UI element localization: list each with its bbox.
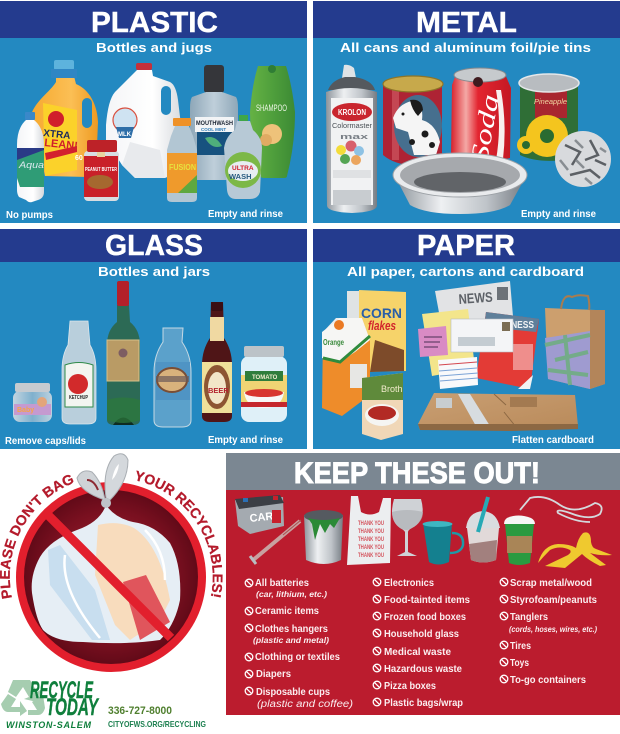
icon: plastic bag bbox=[347, 496, 391, 565]
item: clothes hangers: Clothes hangers bbox=[255, 624, 328, 635]
icon: aluminum foil ball bbox=[555, 131, 611, 187]
icon: white milk jug bbox=[106, 63, 184, 178]
note: remove caps: Remove caps/lids bbox=[5, 436, 86, 447]
item: household glass: Household glass bbox=[384, 629, 459, 640]
icon: magazine: BUSINESS bbox=[491, 320, 534, 331]
item: medical waste: Medical waste bbox=[384, 647, 451, 658]
logo text: today: TODAY bbox=[46, 694, 99, 721]
icon: orange detergent jug: LEAN! bbox=[44, 137, 78, 152]
icon: banana peel bbox=[538, 532, 612, 568]
heading: glass: GLASS bbox=[105, 230, 203, 262]
item: frozen food boxes: Frozen food boxes bbox=[384, 612, 466, 623]
panel: plastic bbox=[0, 1, 307, 223]
icon: dish soap bottle bbox=[224, 115, 262, 199]
item: pizza boxes: Pizza boxes bbox=[384, 681, 436, 692]
list column 2 bbox=[373, 578, 470, 709]
icon: baby food jar bbox=[13, 383, 52, 422]
icon: prohibition slash bbox=[47, 514, 171, 638]
icon: spray paint can: max bbox=[340, 134, 368, 141]
icon: white milk jug: MLK bbox=[118, 132, 132, 138]
icon: pineapple can bbox=[517, 74, 579, 161]
icon: beer bottle: BEER bbox=[208, 386, 229, 395]
icon: baby food jar: Baby bbox=[17, 407, 34, 414]
icon: newspaper: NEWS bbox=[458, 289, 493, 307]
icon: syringe bbox=[250, 520, 301, 564]
subheading: bottles and jugs: Bottles and jugs bbox=[96, 40, 212, 55]
panel: glass bbox=[0, 229, 307, 449]
icon: water bottle bbox=[17, 112, 44, 202]
icon: broth carton: Broth bbox=[381, 384, 403, 394]
item: styrofoam: Styrofoam/peanuts bbox=[510, 595, 597, 606]
item note: cups: (plastic and coffee) bbox=[257, 699, 353, 710]
icon: car battery bbox=[235, 495, 284, 534]
icon: wine bottle bbox=[107, 281, 140, 425]
icon: dish soap bottle: ULTRA bbox=[232, 165, 254, 172]
panel: metal bbox=[313, 1, 620, 223]
icon: orange juice carton bbox=[322, 318, 370, 416]
icon: mouthwash bottle: MOUTHWASH bbox=[196, 120, 233, 127]
heading: keep these out: KEEP THESE OUT! bbox=[294, 457, 540, 490]
icon: cereal box bbox=[347, 290, 406, 372]
icon: index card bbox=[438, 357, 478, 389]
icon: cereal box: CORN bbox=[361, 305, 402, 321]
item: tires: Tires bbox=[510, 641, 531, 652]
icon: pineapple can: Pineapple bbox=[534, 97, 567, 106]
item: all batteries: All batteries bbox=[255, 578, 309, 589]
subheading: all paper: All paper, cartons and cardboard bbox=[347, 264, 584, 279]
logo text: recycle: RECYCLE bbox=[30, 677, 94, 704]
item: scrap metal: Scrap metal/wood bbox=[510, 578, 592, 589]
item: toys: Toys bbox=[510, 658, 529, 669]
subheading: all cans and foil: All cans and aluminum foil/pie tins bbox=[340, 40, 591, 55]
icon: mouthwash bottle bbox=[190, 65, 238, 180]
list column 1 bbox=[245, 578, 353, 710]
icon: plastic cup with straw bbox=[466, 497, 500, 562]
item: plastic bags: Plastic bags/wrap bbox=[384, 698, 463, 709]
icon: coffee cup bbox=[504, 516, 535, 565]
icon: pie tin bbox=[393, 153, 527, 214]
icon: green shampoo bottle bbox=[250, 65, 295, 178]
icon: plastic bag: THANK YOU bbox=[358, 528, 384, 535]
icon: paint bucket bbox=[304, 510, 343, 564]
heading: metal: METAL bbox=[416, 7, 517, 39]
item: hazardous waste: Hazardous waste bbox=[384, 664, 462, 675]
heading: plastic: PLASTIC bbox=[91, 7, 218, 39]
icon: dog food can bbox=[383, 76, 443, 165]
icon: juice bottle: FUSION bbox=[169, 163, 196, 172]
icon: prohibition circle bbox=[16, 482, 206, 672]
website: CITYOFWS.ORG/RECYCLING bbox=[108, 719, 206, 729]
icon: yellow notepad bbox=[422, 309, 475, 376]
note: empty and rinse: Empty and rinse bbox=[208, 209, 283, 220]
panel: paper bbox=[313, 229, 620, 449]
icon: clear milk bottle bbox=[154, 328, 191, 427]
icon: spray paint can: Colormaster bbox=[332, 123, 373, 130]
item note: batteries: (car, lithium, etc.) bbox=[256, 589, 327, 599]
icon: soda can bbox=[451, 68, 511, 164]
icon: plastic bag: THANK YOU bbox=[358, 544, 384, 551]
item: tanglers: Tanglers bbox=[510, 612, 548, 623]
icon: orange detergent jug: 60 bbox=[75, 155, 83, 162]
icon: dish soap bottle: WASH bbox=[229, 172, 252, 181]
icon: tomato sauce jar bbox=[241, 346, 287, 422]
item: disposable cups: Disposable cups bbox=[256, 687, 330, 698]
note: empty and rinse: Empty and rinse bbox=[208, 435, 283, 446]
icon: plastic bag: THANK YOU bbox=[358, 552, 384, 559]
icon: green shampoo bottle: SHAMPOO bbox=[256, 103, 287, 114]
item note: hangers: (plastic and metal) bbox=[253, 635, 329, 645]
icon: orange juice carton: Orange bbox=[323, 338, 344, 347]
icon: plastic bag: THANK YOU bbox=[358, 520, 384, 527]
illustration: no plastic bags sign bbox=[16, 454, 206, 672]
icon: paper grocery bag bbox=[545, 295, 605, 389]
icon: water bottle: Aqua bbox=[18, 160, 44, 170]
icon: peanut butter jar bbox=[84, 140, 119, 201]
icon: spray paint can bbox=[326, 65, 377, 213]
icon: charging cable bbox=[520, 497, 602, 522]
icon: cereal box: flakes bbox=[368, 318, 396, 333]
icon: pink sticky note bbox=[418, 326, 448, 357]
icon: peanut butter jar: PEANUT BUTTER bbox=[85, 167, 117, 173]
item note: tanglers: (cords, hoses, wires, etc.) bbox=[509, 624, 597, 634]
icon: orange detergent jug: XTRA bbox=[43, 128, 71, 142]
icon: orange detergent jug bbox=[31, 60, 98, 177]
note: no pumps: No pumps bbox=[6, 210, 53, 221]
subheading: bottles and jars: Bottles and jars bbox=[98, 264, 210, 279]
icon: newspaper bbox=[435, 281, 515, 345]
heading: paper: PAPER bbox=[417, 230, 515, 262]
note: flatten cardboard: Flatten cardboard bbox=[512, 435, 594, 446]
list column 3 bbox=[500, 578, 597, 686]
icon: beer bottle bbox=[202, 302, 232, 422]
item: to-go containers: To-go containers bbox=[510, 675, 586, 686]
icon: car battery: CAR bbox=[249, 511, 274, 525]
item: food-tainted: Food-tainted items bbox=[384, 595, 470, 606]
icon: tomato sauce jar: TOMATO bbox=[252, 375, 278, 381]
icon: ketchup bottle bbox=[62, 321, 96, 424]
icon: plastic bag: THANK YOU bbox=[358, 536, 384, 543]
icon: ketchup bottle: KETCHUP bbox=[69, 395, 88, 401]
icon: spray paint can: KROLON bbox=[338, 108, 366, 117]
item: ceramic items: Ceramic items bbox=[255, 606, 319, 617]
logo: recycle today bbox=[1, 677, 99, 730]
icon: envelope bbox=[451, 319, 513, 352]
note: empty and rinse: Empty and rinse bbox=[521, 209, 596, 220]
icon: wine glass bbox=[392, 499, 423, 556]
item: diapers: Diapers bbox=[256, 669, 291, 680]
icon: flattened cardboard bbox=[418, 393, 578, 431]
icon: recycling arrows bbox=[1, 680, 45, 716]
phone number: 336-727-8000 bbox=[108, 705, 172, 717]
icon: tied trash bag bbox=[32, 454, 180, 643]
icon: magazine bbox=[476, 312, 539, 389]
arched text: your recyclables: YOUR RECYCLABLES! bbox=[136, 470, 223, 598]
icon: mouthwash bottle: COOL MINT bbox=[201, 127, 226, 132]
icon: teal mug bbox=[422, 521, 463, 564]
icon: juice bottle bbox=[167, 118, 197, 202]
logo text: winston-salem: WINSTON-SALEM bbox=[6, 720, 92, 730]
icon: soda can: Soda bbox=[466, 92, 505, 164]
item: clothing or textiles: Clothing or textiles bbox=[255, 652, 340, 663]
icon: broth carton bbox=[362, 373, 403, 440]
panel: keep these out bbox=[226, 453, 620, 715]
item: electronics: Electronics bbox=[384, 578, 434, 589]
